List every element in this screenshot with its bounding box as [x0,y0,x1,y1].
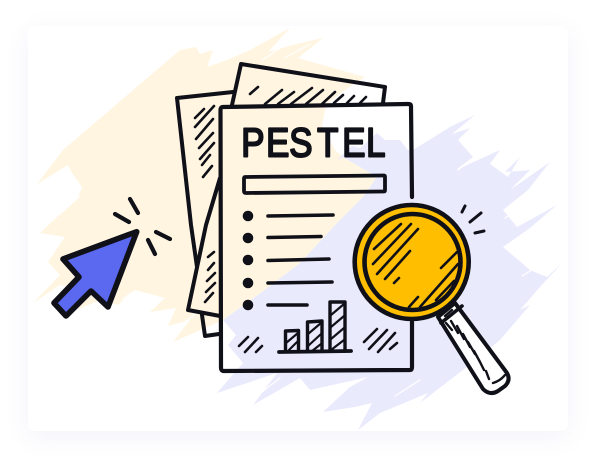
back sheet: left [177,92,233,336]
brush stroke: cream [33,28,377,342]
icon: cursor arrow [54,232,137,316]
hatching: middle sheet [250,87,366,104]
icon: magnifying glass [355,205,509,393]
hatching: page bottom right [364,329,397,352]
lens glare [373,224,458,307]
hatching: page bottom left [239,337,262,352]
brush stroke: lavender [217,115,562,430]
hatching: left sheet [195,106,215,302]
back sheet: middle [188,64,385,316]
title underline box [244,176,385,193]
title: PESTEL: PESTEL [241,121,386,166]
front sheet: report page [220,104,412,371]
sparkle: magnifier [462,206,484,233]
lens glass [364,214,460,310]
sparkle: cursor [115,199,170,254]
handle [438,303,509,393]
bar chart [279,302,351,352]
lens rim [355,205,469,319]
bullet list [243,211,333,310]
panel: white card [28,26,568,431]
